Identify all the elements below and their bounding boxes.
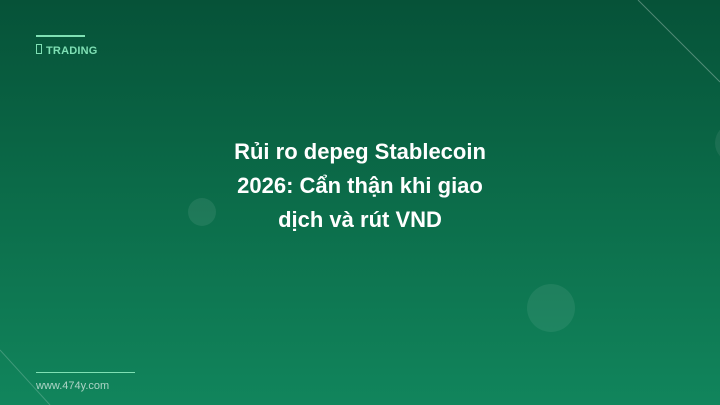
title: [234, 139, 486, 232]
title: Rủi ro depeg Stablecoin: [234, 139, 486, 164]
title: dịch và rút VND: [278, 207, 442, 232]
category tag: [36, 35, 98, 57]
category tag: TRADING: [46, 45, 98, 57]
footer url: www.474y.com: [36, 380, 109, 392]
title: 2026: Cẩn thận khi giao: [237, 173, 483, 198]
